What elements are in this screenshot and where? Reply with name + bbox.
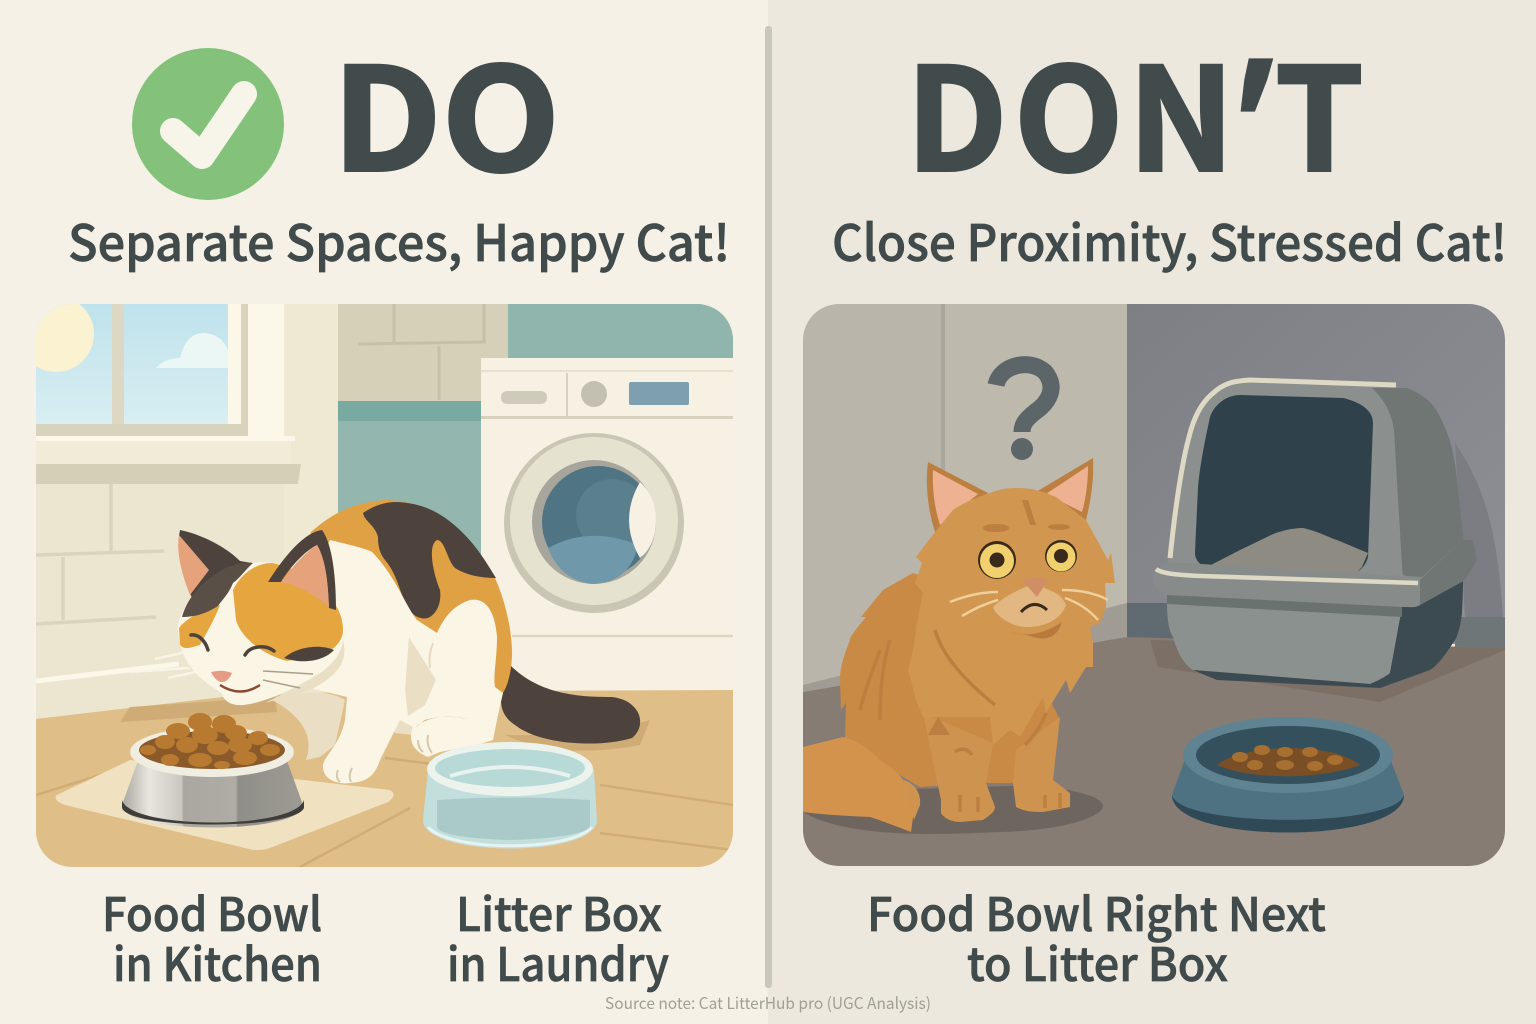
panel: stressed cat scene [803, 304, 1505, 866]
heading: DON'T: ' [1210, 6, 1272, 212]
heading: DON'T: T [1275, 6, 1364, 212]
label: litter box in laundry: in Laundry [447, 929, 669, 995]
hind foot [903, 780, 920, 820]
walls [803, 304, 1505, 704]
tray front [1167, 600, 1402, 684]
nose and frown [1021, 578, 1048, 612]
label: litter box in laundry: Litter Box [456, 879, 662, 945]
hood side [1372, 388, 1464, 580]
white torso and hind leg [310, 540, 503, 783]
floor [36, 690, 733, 867]
washing machine [481, 358, 733, 690]
left front leg [923, 713, 995, 822]
floor planks [36, 758, 733, 867]
tray dark side [1193, 578, 1463, 688]
rim band [1167, 595, 1402, 617]
blue food bowl [1172, 717, 1404, 832]
box floor shadow [1150, 640, 1505, 702]
background: left side [0, 0, 768, 1024]
litter box [1153, 379, 1477, 688]
ginger cat [803, 458, 1115, 832]
label: food bowl in kitchen [102, 879, 322, 995]
tail shadow [505, 720, 650, 751]
window [36, 304, 301, 484]
eyes [978, 540, 1077, 579]
right ear [1036, 458, 1093, 520]
label: food bowl in kitchen: Food Bowl [102, 879, 322, 945]
label: litter box in laundry [447, 879, 669, 995]
litter mound [1207, 528, 1368, 574]
label: food bowl next to litter box: to Litter Box [967, 929, 1228, 995]
heading: DO: DO [332, 6, 560, 212]
paw lines [337, 735, 432, 782]
food bowl [122, 713, 304, 828]
back body [840, 573, 1060, 787]
opening [1195, 395, 1373, 573]
panel: happy cat scene [18, 296, 733, 867]
calico cat [130, 500, 640, 783]
chin shadow [1012, 622, 1062, 639]
question mark [996, 365, 1051, 460]
belly shading [405, 637, 436, 716]
icon: green check mark [132, 48, 284, 200]
head and chest mane [908, 488, 1115, 745]
whiskers [263, 671, 313, 688]
tray rim [1153, 540, 1477, 607]
floor shadow by wall [120, 697, 277, 722]
muzzle [993, 583, 1066, 627]
background: right side [768, 0, 1536, 1024]
cat floor shadow [803, 785, 1103, 834]
floor [803, 637, 1505, 866]
leg patch [928, 717, 950, 735]
litter box shadow on wall [1455, 443, 1503, 617]
rim trim [1156, 569, 1418, 583]
right ear [268, 530, 336, 610]
brick lines [36, 484, 164, 624]
beige under-body shadow [272, 692, 420, 760]
cat face [191, 635, 274, 655]
nose and smile [211, 671, 260, 692]
whiskers [950, 590, 1108, 620]
head orange patch [233, 563, 343, 661]
baseboards [803, 603, 1505, 692]
subheading: don't: Close Proximity, Stressed Cat! [832, 204, 1507, 276]
head [178, 562, 343, 705]
chest shade under chin [265, 640, 344, 703]
tail [803, 737, 915, 832]
orange back [310, 500, 512, 700]
hind foot back [415, 717, 468, 728]
left ear [179, 530, 252, 600]
dark back patch [363, 502, 496, 618]
cream trim [1170, 380, 1396, 558]
left ear [927, 462, 988, 532]
food mat [56, 760, 394, 850]
cat tail [501, 665, 640, 744]
fur marks [860, 630, 1060, 812]
eye patch [284, 647, 334, 661]
subheading: do: Separate Spaces, Happy Cat! [68, 204, 730, 276]
heading: DON'T: DON [906, 6, 1234, 212]
tiled wall section [338, 304, 733, 554]
water bowl [423, 742, 597, 848]
hood front frame [1168, 379, 1403, 582]
label: food bowl in kitchen: in Kitchen [113, 929, 322, 995]
head dark patch [182, 563, 253, 617]
brows [983, 500, 1070, 532]
right front leg [1013, 717, 1070, 812]
baseboard [36, 664, 179, 681]
center divider [765, 26, 772, 988]
label: food bowl next to litter box: Food Bowl Right Next [867, 879, 1326, 945]
source note: Source note: Cat LitterHub pro (UGC Analysis) [605, 990, 931, 1014]
label: food bowl next to litter box [867, 879, 1326, 995]
wall [36, 484, 696, 719]
